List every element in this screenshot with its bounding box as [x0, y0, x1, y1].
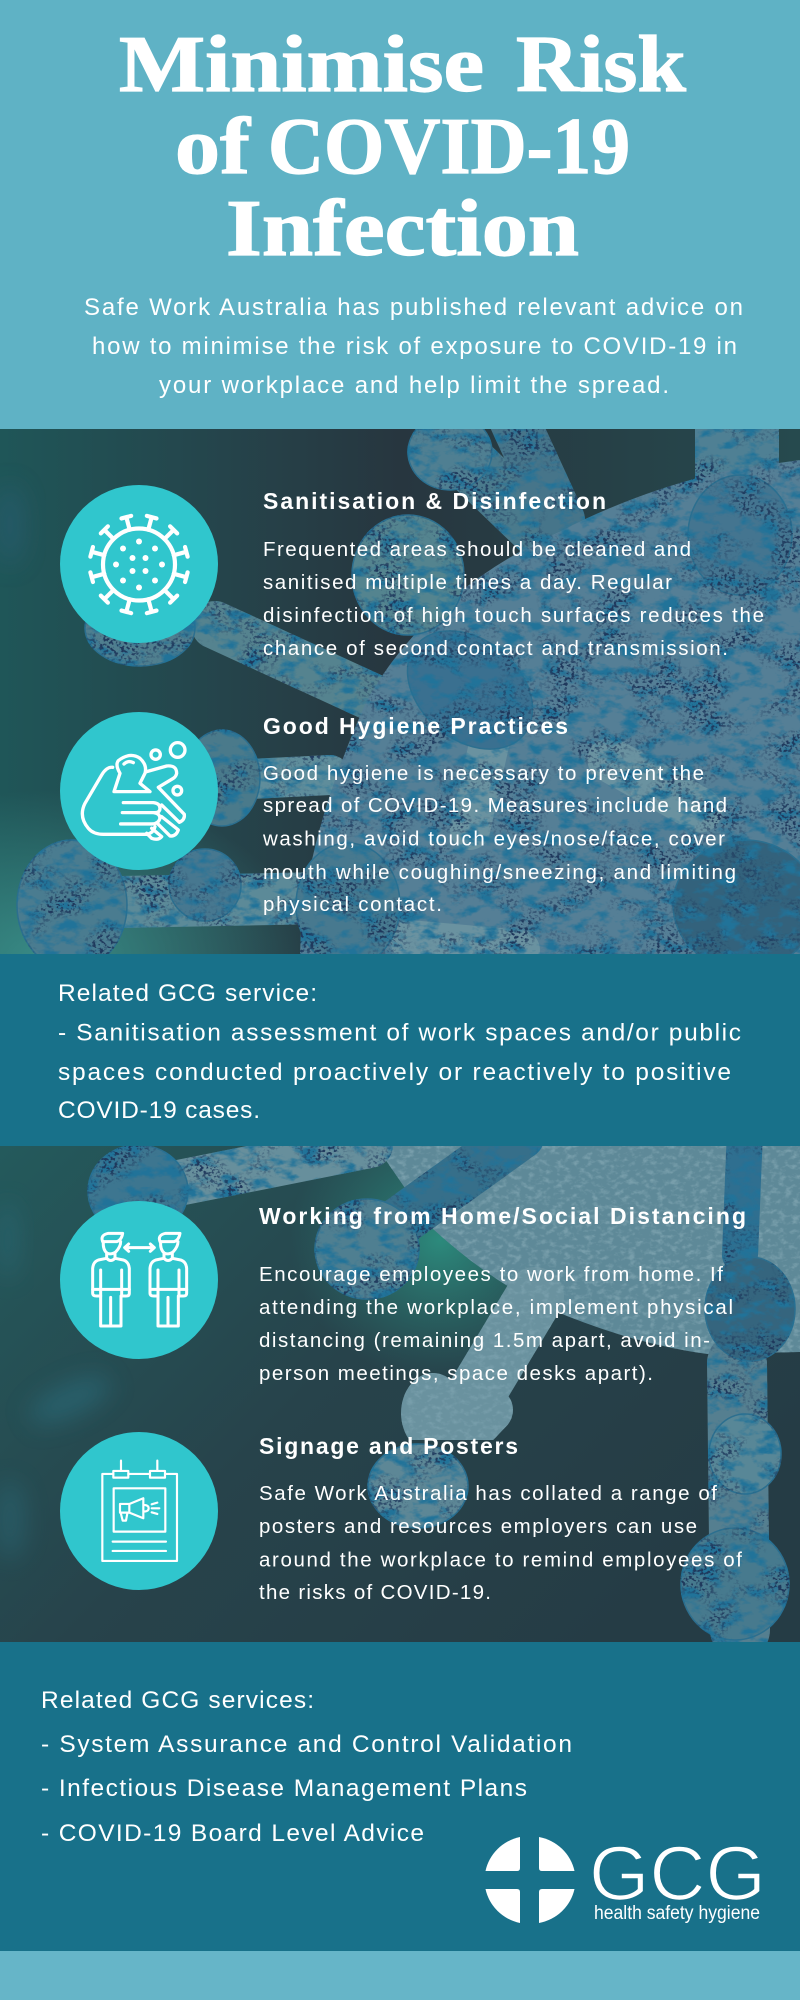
panel: related service band: COVID-19 cases.: [58, 1097, 260, 1124]
text: working from home and social distancing: Working from Home/Social Distancing: [259, 1203, 746, 1229]
panel: related service band: - Sanitisation assessment of work spaces and/or public: [58, 1020, 741, 1046]
intro text: how to minimise the risk of exposure to COVID-19 in: [92, 333, 737, 360]
text: sanitisation and disinfection: disinfection of high touch surfaces reduces the: [263, 604, 764, 627]
icon: hand washing in circle: [60, 712, 218, 870]
icon: virus in circle: [60, 485, 218, 643]
text: good hygiene practices: Good Hygiene Practices: [263, 713, 568, 739]
text: working from home and social distancing: attending the workplace, implement physical: [259, 1296, 733, 1319]
text: working from home and social distancing: distancing (remaining 1.5m apart, avoid in-: [259, 1329, 710, 1352]
text: good hygiene practices: physical contact.: [263, 893, 442, 916]
title: [119, 21, 687, 273]
panel: related service band: spaces conducted proactively or reactively to positive: [58, 1059, 731, 1086]
panel: related services band: - System Assurance and Control Validation: [41, 1731, 572, 1758]
text: sanitisation and disinfection: sanitised multiple times a day. Regular: [263, 571, 672, 594]
text: signage and posters: posters and resources employers can use: [259, 1515, 697, 1538]
panel: virus background one: [0, 429, 800, 954]
text: good hygiene practices: Good hygiene is necessary to prevent the: [263, 762, 704, 785]
icon: social distancing in circle: [60, 1201, 218, 1359]
text: signage and posters: around the workplace to remind employees of: [259, 1548, 742, 1572]
text: sanitisation and disinfection: Frequented areas should be cleaned and: [263, 538, 691, 561]
panel: header background: [0, 0, 800, 429]
title: Risk: [516, 21, 687, 109]
logo: GCG: health safety hygiene: [594, 1903, 760, 1924]
text: good hygiene practices: mouth while coughing/sneezing, and limiting: [263, 861, 736, 884]
panel: related services band: [0, 1642, 800, 1951]
panel: related services band: Related GCG services:: [41, 1687, 314, 1714]
text: signage and posters: Signage and Posters: [259, 1433, 518, 1459]
text: sanitisation and disinfection: chance of second contact and transmission.: [263, 637, 728, 660]
panel: footer strip: [0, 1951, 800, 2000]
intro text: Safe Work Australia has published relevant advice on: [84, 294, 743, 321]
panel: related service band: [0, 954, 800, 1146]
text: good hygiene practices: [262, 713, 736, 916]
text: signage and posters: [259, 1433, 742, 1604]
text: working from home and social distancing: Encourage employees to work from home. If: [259, 1263, 723, 1286]
icon: logo cross: [486, 1837, 574, 1923]
text: signage and posters: the risks of COVID-19.: [259, 1581, 491, 1604]
text: working from home and social distancing: person meetings, space desks apart).: [259, 1362, 653, 1385]
text: sanitisation and disinfection: Sanitisation & Disinfection: [263, 488, 606, 514]
panel: related service band: Related GCG service:: [58, 980, 317, 1007]
text: good hygiene practices: washing, avoid touch eyes/nose/face, cover: [262, 828, 725, 850]
title: of: [175, 103, 252, 191]
title: Minimise: [119, 21, 484, 109]
panel: related services band: - Infectious Disease Management Plans: [41, 1775, 527, 1802]
panel: virus background two: [0, 1100, 800, 1642]
icon: poster with megaphone in circle: [60, 1432, 218, 1590]
panel: related services band: - COVID-19 Board Level Advice: [41, 1820, 424, 1847]
intro text: your workplace and help limit the spread.: [159, 372, 669, 399]
logo: GCG: [486, 1831, 766, 1924]
text: sanitisation and disinfection: [263, 488, 764, 660]
text: working from home and social distancing: [259, 1203, 746, 1385]
intro text: [84, 294, 743, 399]
text: good hygiene practices: spread of COVID-19. Measures include hand: [263, 794, 727, 817]
logo: GCG: GCG: [589, 1831, 766, 1917]
title: Infection: [226, 185, 579, 273]
title: COVID-19: [268, 103, 630, 191]
text: signage and posters: Safe Work Australia has collated a range of: [259, 1482, 717, 1505]
